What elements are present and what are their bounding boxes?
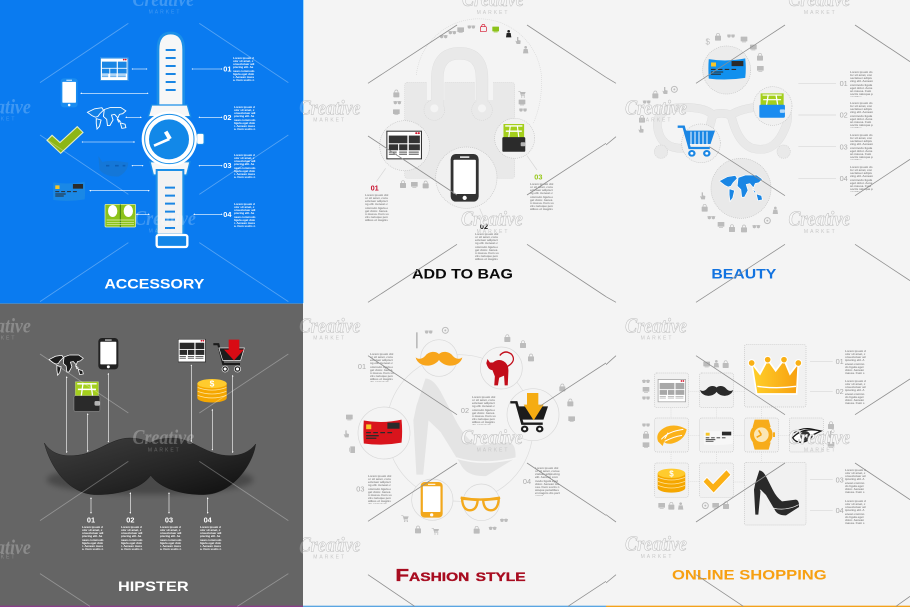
panel: accessory: Creative <box>134 208 196 230</box>
icon: phone <box>451 154 479 202</box>
numbers: 04 <box>523 477 531 486</box>
icon: wallet <box>759 93 785 118</box>
panel: fashion style: MARKET <box>313 555 346 561</box>
panel: online shopping: Creative <box>789 427 850 449</box>
panel: beauty: MARKET <box>640 118 672 124</box>
icon: money <box>105 204 136 227</box>
lines <box>798 83 836 178</box>
shadow <box>47 465 253 495</box>
tile: watch <box>745 418 778 452</box>
large ring <box>386 355 533 501</box>
panel: add to bag: MARKET <box>477 10 509 16</box>
numbers: 03 <box>356 485 364 494</box>
icon: page <box>658 379 686 402</box>
tile: eye <box>789 418 823 452</box>
icon: eye <box>793 429 821 442</box>
circle: cart <box>682 124 720 163</box>
panel: online shopping: Creative <box>625 534 687 556</box>
icon: phone <box>421 482 443 518</box>
numbers <box>371 173 542 231</box>
title: hipster: HIPSTER <box>118 578 189 594</box>
icon: wallet <box>74 382 100 411</box>
icon: check <box>703 470 731 493</box>
small icons <box>393 24 528 188</box>
small icons: $ <box>705 38 710 47</box>
numbers: 02 <box>480 222 488 231</box>
icon: watch <box>750 420 775 450</box>
numbers: 01 <box>836 357 844 366</box>
panel: add to bag: MARKET <box>477 229 509 235</box>
icon: cart <box>678 127 715 157</box>
icon: coins <box>197 379 227 403</box>
circle: cart <box>507 389 559 441</box>
arrows <box>67 365 233 513</box>
numbers: 03 <box>165 516 173 525</box>
tile: page <box>655 373 688 408</box>
icon: cat head <box>98 156 128 177</box>
title: fashion style: Fashion style <box>395 565 526 585</box>
icon: card <box>704 430 733 445</box>
circle: phone <box>412 479 453 520</box>
tile: card <box>700 418 733 452</box>
icon: world map <box>87 107 126 129</box>
icon: phone <box>61 78 78 107</box>
icon: phone <box>98 338 118 369</box>
numbers: 04 <box>223 210 232 219</box>
icon: coins <box>658 468 685 493</box>
numbers: 01 <box>358 362 366 371</box>
arrows <box>81 69 222 214</box>
circle: wallet <box>495 118 535 158</box>
panel: accessory <box>0 0 303 303</box>
icon: page <box>386 131 422 159</box>
numbers <box>223 64 232 219</box>
icon: bag <box>405 53 515 178</box>
numbers: 01 <box>840 79 848 88</box>
panel: online shopping: MARKET <box>804 447 837 453</box>
icon: credit card <box>53 182 85 201</box>
panel: online shopping <box>606 303 910 607</box>
tile: mustache <box>700 373 733 408</box>
circle: map <box>711 158 771 218</box>
circle: cat <box>480 347 522 389</box>
icon: glasses <box>654 106 790 158</box>
panel: accessory: MARKET <box>149 228 181 234</box>
numbers: 02 <box>840 111 848 120</box>
numbers: 02 <box>223 113 231 122</box>
title: beauty: BEAUTY <box>711 266 777 282</box>
numbers: 03 <box>223 161 231 170</box>
connectors <box>671 391 789 482</box>
icon: shoe outline <box>413 378 516 476</box>
panel: add to bag: Creative <box>461 209 523 231</box>
icon: mustache <box>416 352 462 366</box>
numbers: 02 <box>461 406 469 415</box>
numbers: 04 <box>840 174 848 183</box>
panel: add to bag <box>303 0 606 303</box>
icon: world map <box>49 355 83 375</box>
circle: card <box>358 407 410 459</box>
tile: crown <box>744 345 806 407</box>
numbers: 04 <box>204 516 213 525</box>
tile: leaf <box>655 418 688 452</box>
icon: page <box>100 58 128 81</box>
panel: fashion style: MARKET <box>313 336 346 342</box>
numbers: 03 <box>534 173 542 182</box>
numbers <box>356 362 531 494</box>
icon: watch <box>142 33 204 247</box>
icon: check <box>47 127 83 153</box>
icon: cat <box>486 352 513 385</box>
panel: fashion style: MARKET <box>477 447 509 453</box>
icon: glasses <box>461 498 500 510</box>
panel: fashion style: Creative <box>461 427 523 449</box>
numbers: 02 <box>836 387 844 396</box>
tile: check <box>700 463 733 497</box>
numbers: 01 <box>87 516 95 525</box>
circle: card <box>703 46 751 94</box>
panel: add to bag: MARKET <box>313 118 346 124</box>
icon: shoe <box>754 470 799 516</box>
numbers: 03 <box>840 142 848 151</box>
title: add to bag: ADD TO BAG <box>412 266 513 282</box>
panel: online shopping: MARKET <box>641 336 673 342</box>
circle: mustache <box>421 340 457 376</box>
panel: hipster: MARKET <box>148 447 181 453</box>
panel: beauty: Creative <box>789 209 850 231</box>
circle: phone <box>436 147 497 208</box>
panel: online shopping: MARKET <box>641 554 673 560</box>
panel: beauty: MARKET <box>804 10 837 16</box>
icon: cart with arrow <box>213 340 244 372</box>
panel: beauty: Creative <box>625 97 687 119</box>
numbers: 01 <box>223 64 231 73</box>
small icons <box>344 327 575 535</box>
panel: fashion style <box>303 303 606 607</box>
panel: beauty <box>606 0 910 303</box>
icon: mustache <box>700 386 733 396</box>
icon: credit card <box>363 420 402 445</box>
icon: credit card <box>708 58 746 80</box>
panel: online shopping: Creative <box>625 315 687 337</box>
icon: wallet <box>502 124 525 152</box>
lines <box>810 361 833 510</box>
tile: shoe <box>744 462 806 525</box>
panel: hipster <box>0 303 303 607</box>
icon: leaf <box>657 425 687 446</box>
panel: hipster: Creative <box>132 427 194 449</box>
large arc <box>416 19 542 124</box>
tile: coins <box>655 463 688 497</box>
icon: page <box>178 339 206 362</box>
circle: glasses <box>463 484 500 521</box>
small icons <box>638 33 778 232</box>
small icons <box>642 360 834 510</box>
numbers: 04 <box>836 506 844 515</box>
shoe sole stripe <box>456 458 516 462</box>
icon: mustache <box>44 438 256 495</box>
numbers: 02 <box>126 516 134 525</box>
icon: cart with arrow <box>510 393 548 432</box>
panel: beauty: MARKET <box>804 229 837 235</box>
title: online shopping: ONLINE SHOPPING <box>672 567 827 583</box>
connectors <box>376 156 537 220</box>
title: accessory: ACCESSORY <box>104 275 205 291</box>
icon: crown <box>748 356 802 394</box>
numbers <box>840 79 848 183</box>
numbers <box>836 357 844 515</box>
circle: page <box>380 121 430 171</box>
icon: world map <box>719 175 762 201</box>
panel: accessory: MARKET <box>149 9 181 15</box>
numbers <box>87 516 213 525</box>
circle: wallet <box>753 87 792 125</box>
numbers: 03 <box>836 475 844 484</box>
numbers: 01 <box>371 184 379 193</box>
